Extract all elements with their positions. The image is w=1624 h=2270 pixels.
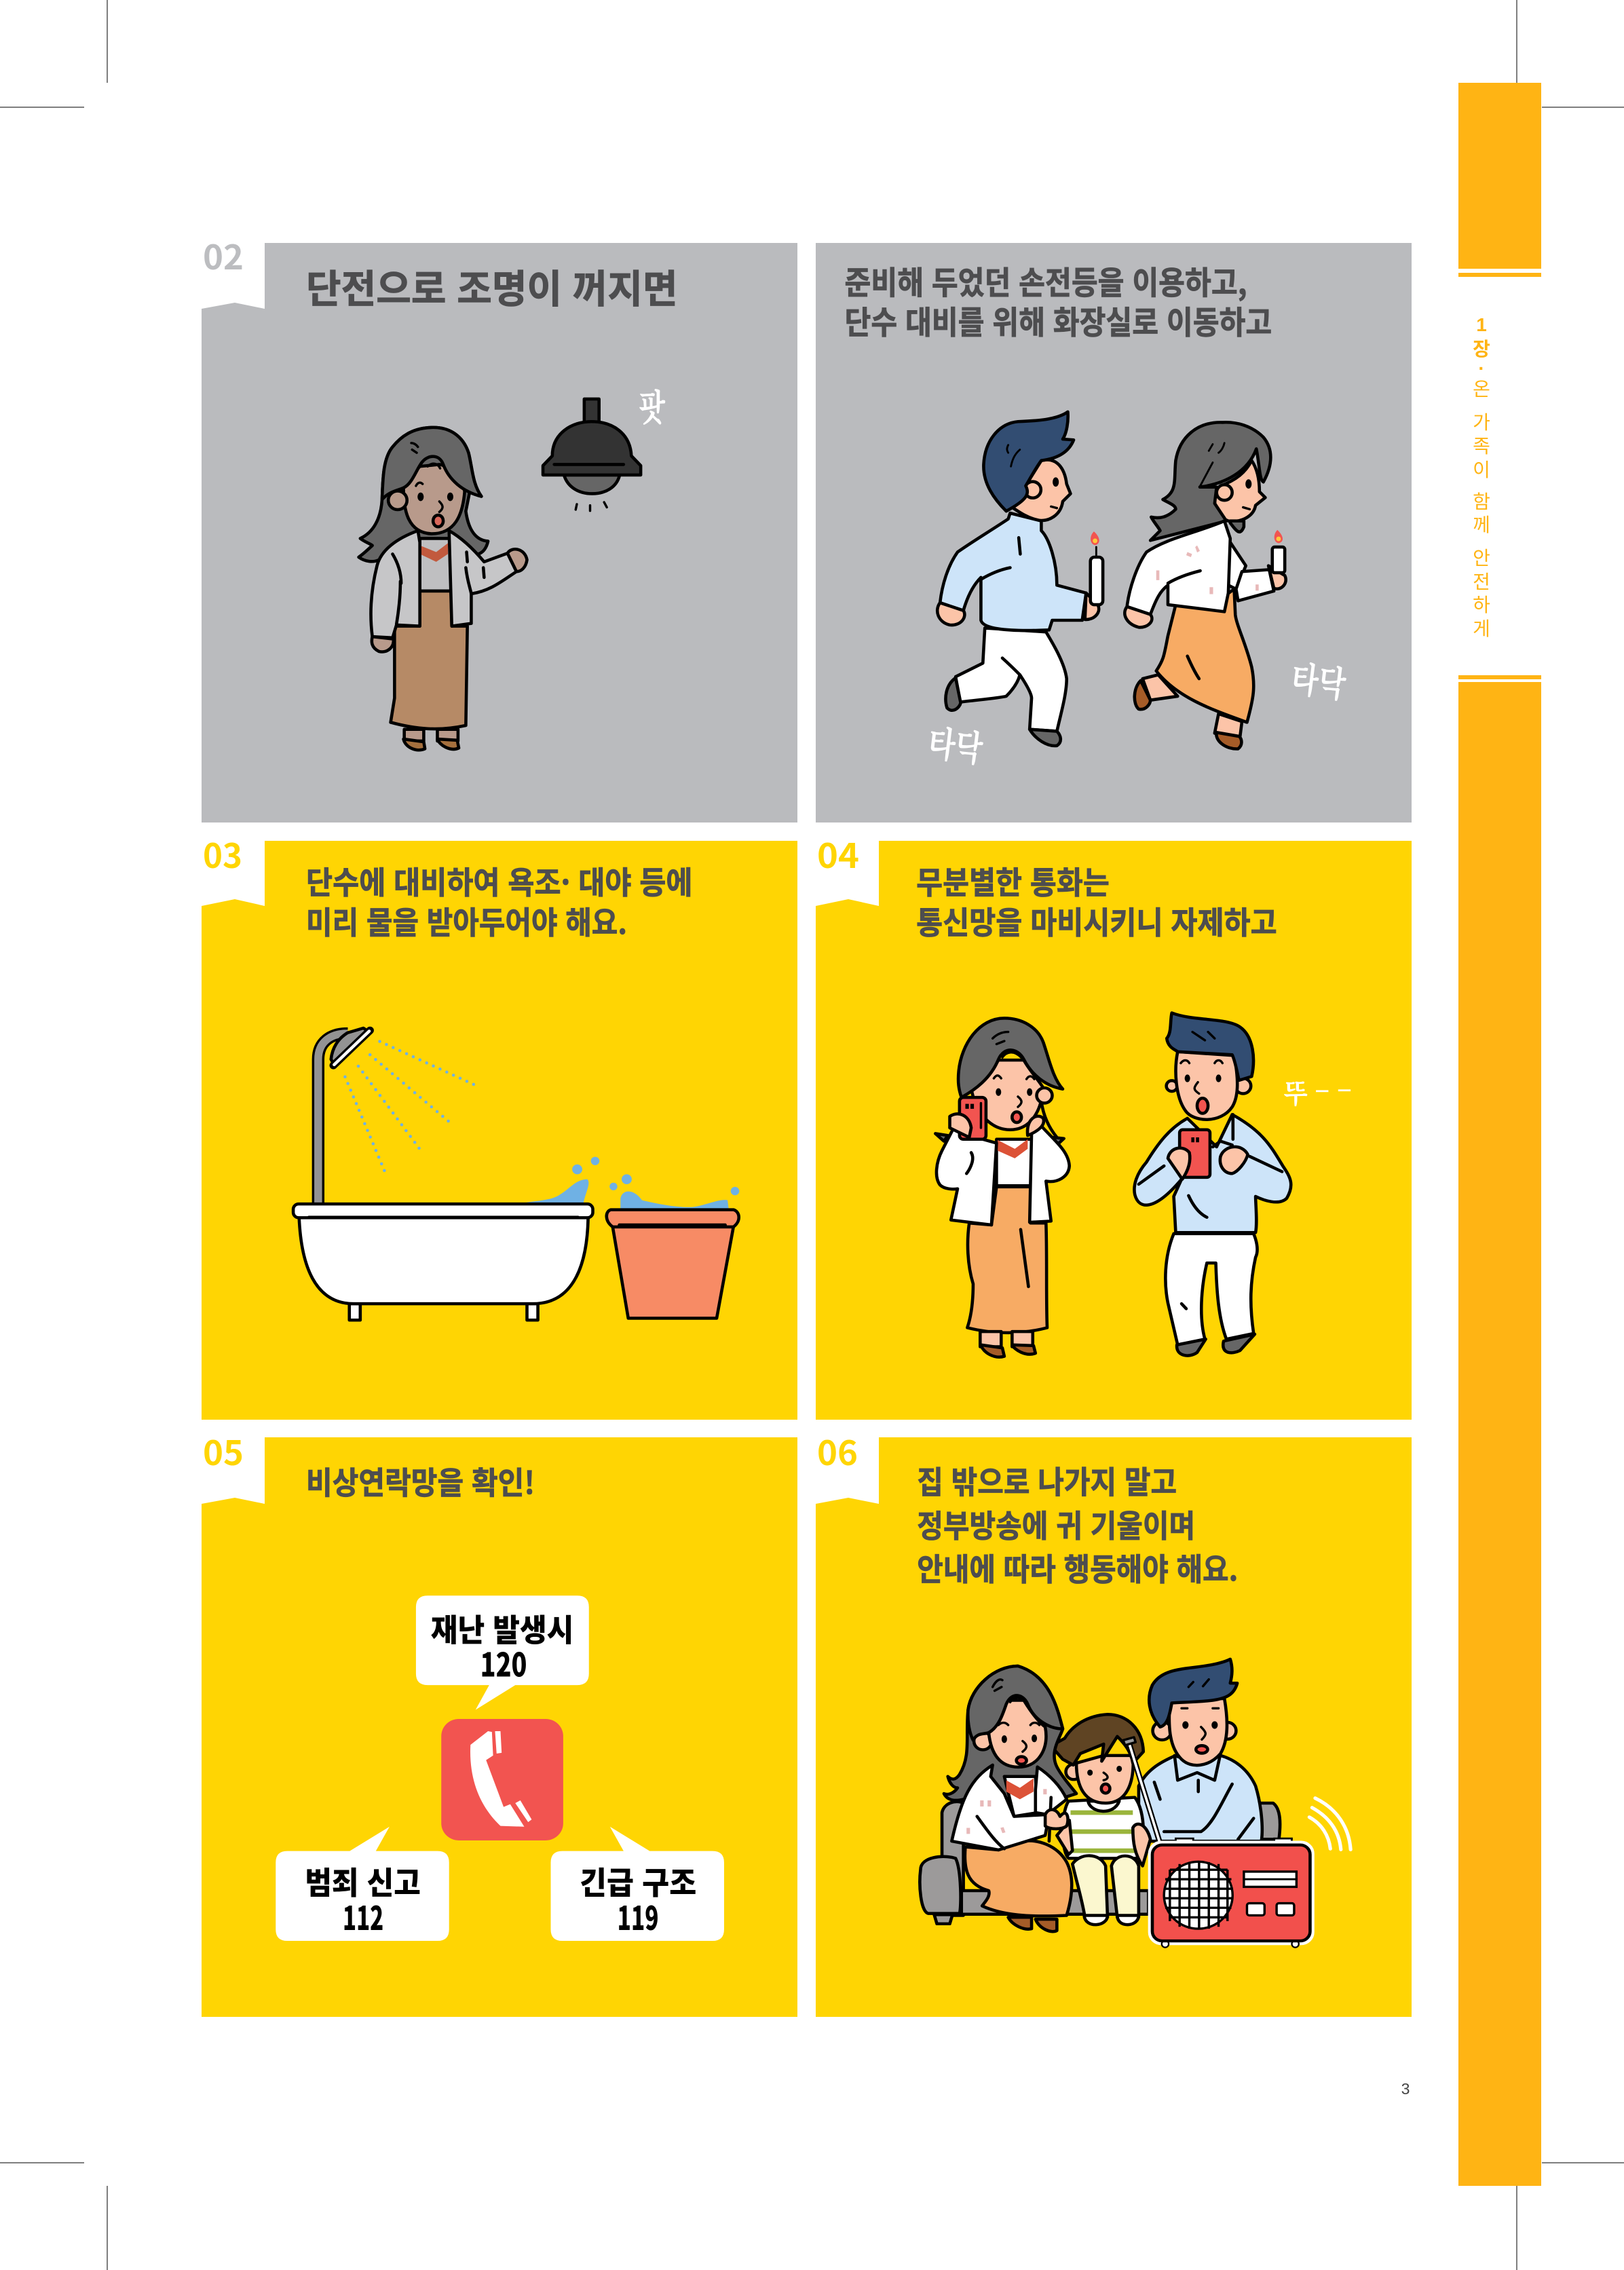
number 06: 06 [817, 1426, 858, 1475]
callout: rescue 119 [551, 1827, 724, 1941]
panel 06 background [816, 1437, 1412, 2017]
panel background [816, 243, 1412, 822]
illustration: radio [1123, 1737, 1312, 1948]
sound effect: footsteps left: 타닥 [926, 715, 986, 772]
instruction text: 준비해 두었던 손전등을 이용하고, [845, 257, 1247, 304]
callout: crime 112: 범죄 신고 [305, 1859, 421, 1904]
callout: disaster 120 [416, 1595, 589, 1710]
panel: candles and flashlight [816, 243, 1412, 822]
sidebar vertical chapter text: 이 [1473, 459, 1490, 480]
illustration: sofa [920, 1802, 1280, 1924]
illustration: running woman with candle [1125, 422, 1286, 749]
illustration: bathtub [293, 1204, 593, 1320]
instruction text [917, 1458, 1238, 1590]
sidebar vertical chapter text: 장 [1473, 339, 1490, 360]
instruction text: 무분별한 통화는 [916, 858, 1110, 903]
number 03: 03 [203, 829, 242, 878]
page number: 3 [1401, 2080, 1410, 2098]
sidebar vertical chapter text: 온 [1473, 379, 1490, 400]
instruction text [845, 257, 1272, 343]
callout: rescue 119: 긴급 구조 [580, 1859, 696, 1904]
instruction text: 단수에 대비하여 욕조· 대야 등에 [306, 858, 692, 903]
instruction text: 정부방송에 귀 기울이며 [917, 1501, 1195, 1547]
illustration: man on phone [1134, 1013, 1291, 1356]
illustration: woman in the dark [359, 428, 527, 750]
sidebar: chapter band [1458, 83, 1541, 2186]
sidebar vertical chapter text: 족 [1473, 436, 1490, 457]
sidebar vertical chapter text: 함 [1473, 491, 1490, 512]
illustration: shower spray [345, 1042, 477, 1176]
number 02: 02 [203, 231, 244, 280]
sound effect: busy tone [1283, 1072, 1351, 1111]
panel 02 background [202, 243, 797, 822]
number 05: 05 [203, 1426, 244, 1475]
callout: disaster 120: 재난 발생시 [431, 1606, 573, 1650]
sidebar vertical chapter text: 전 [1473, 571, 1490, 592]
instruction text: 안내에 따라 행동해야 해요. [917, 1545, 1238, 1590]
illustration: father [1139, 1659, 1262, 1841]
callout: crime 112 [276, 1827, 449, 1941]
instruction text: 통신망을 마비시키니 자제하고 [916, 898, 1277, 943]
panel 04 background [816, 841, 1412, 1420]
heading 02: 단전으로 조명이 꺼지면 [306, 257, 678, 314]
heading: 비상연락망을 확인! [306, 1458, 535, 1503]
sidebar vertical chapter text: 께 [1473, 514, 1490, 535]
illustration: child [1051, 1714, 1150, 1925]
instruction text: 집 밖으로 나가지 말고 [917, 1458, 1177, 1502]
sound effect: busy tone: 뚜 [1283, 1072, 1308, 1111]
sidebar vertical chapter text: 안 [1473, 548, 1490, 569]
panel 06: stay inside and listen [816, 1426, 1412, 2017]
sidebar vertical chapter text: · [1478, 358, 1485, 379]
instruction text: 단수 대비를 위해 화장실로 이동하고 [845, 297, 1272, 343]
sound effect: pat: 팟 [639, 378, 666, 432]
callout: crime 112: 112 [343, 1892, 383, 1940]
icon: ceiling lamp [543, 399, 641, 511]
instruction text [306, 858, 692, 943]
illustration: running man with candle [937, 412, 1103, 746]
instruction text: 미리 물을 받아두어야 해요. [306, 898, 627, 943]
sound effect: footsteps right: 타닥 [1289, 650, 1349, 708]
number 04: 04 [817, 829, 859, 878]
illustration: mother [944, 1666, 1076, 1931]
panel 05 background [202, 1437, 797, 2017]
illustration: woman on phone [935, 1018, 1070, 1357]
callout: rescue 119: 119 [618, 1892, 659, 1940]
illustration: water overflow [521, 1157, 739, 1210]
sidebar vertical chapter text: 게 [1473, 618, 1490, 639]
icon: sound waves [1309, 1798, 1351, 1849]
panel 03: store water [202, 829, 797, 1420]
panel 05: emergency numbers [202, 1426, 797, 2017]
icon: red phone tile [441, 1719, 563, 1840]
illustration: shower head [318, 1028, 370, 1204]
panel 02: power outage [202, 231, 797, 822]
illustration: bucket [607, 1210, 739, 1318]
sidebar vertical chapter text: 하 [1473, 594, 1490, 616]
instruction text [916, 858, 1277, 943]
panel 04: limit calls [816, 829, 1412, 1420]
callout: disaster 120: 120 [480, 1639, 527, 1687]
sidebar vertical chapter text: 가 [1473, 412, 1490, 433]
sidebar vertical chapter text: 1 [1476, 314, 1487, 335]
panel 03 background [202, 841, 797, 1420]
